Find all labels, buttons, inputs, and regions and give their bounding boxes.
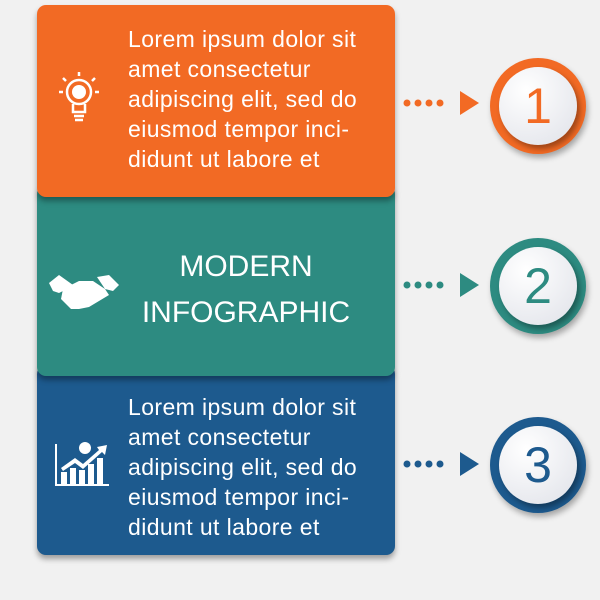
circle 2: 2: [524, 258, 552, 314]
icon: chart: [55, 442, 109, 486]
text: panel 1: didunt ut labore et: [128, 146, 320, 172]
panel: orange: [37, 5, 395, 197]
text: panel 3: Lorem ipsum dolor sit: [128, 394, 356, 420]
text: panel 3: eiusmod tempor inci-: [128, 484, 349, 510]
icon: handshake: [49, 275, 119, 309]
heading: INFOGRAPHIC: [142, 296, 350, 329]
panel: teal: [37, 185, 395, 376]
text: panel 1: amet consectetur: [128, 56, 311, 82]
arrow 1: [404, 91, 479, 115]
text: panel 1: [128, 26, 357, 172]
heading: [142, 250, 350, 329]
icon: bulb: [59, 72, 99, 122]
text: panel 3: didunt ut labore et: [128, 514, 320, 540]
circle 3: 3: [524, 437, 552, 493]
circle 1: [490, 58, 586, 154]
text: panel 3: [128, 394, 357, 540]
circle 1: 1: [524, 78, 552, 134]
text: panel 1: Lorem ipsum dolor sit: [128, 26, 356, 52]
arrow 2: [404, 273, 479, 297]
text: panel 3: adipiscing elit, sed do: [128, 454, 357, 480]
arrow 3: [404, 452, 479, 476]
text: panel 1: eiusmod tempor inci-: [128, 116, 349, 142]
text: panel 1: adipiscing elit, sed do: [128, 86, 357, 112]
heading: MODERN: [179, 250, 313, 283]
text: panel 3: amet consectetur: [128, 424, 311, 450]
panel: blue: [37, 365, 395, 555]
circle 3: [490, 417, 586, 513]
circle 2: [490, 238, 586, 334]
